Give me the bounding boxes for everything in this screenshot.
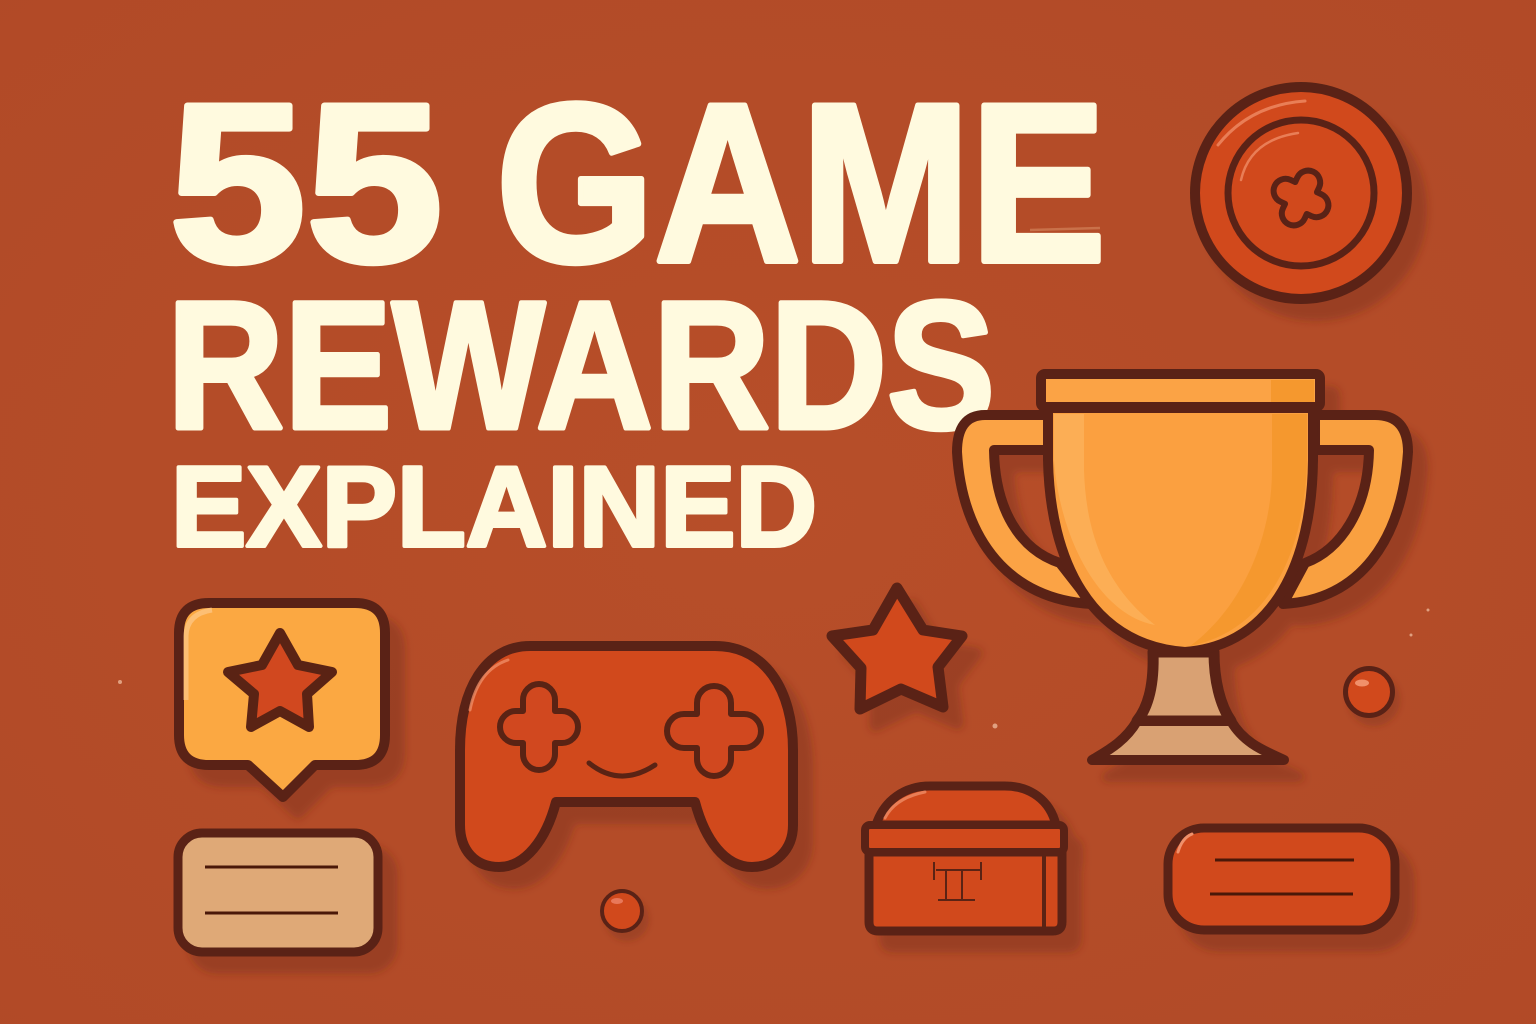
icon: star: [832, 588, 962, 709]
icon: game controller: [460, 646, 793, 867]
icon: speech bubble with star: [179, 603, 385, 797]
bubble: [179, 603, 385, 797]
icon: tan plaque: [178, 833, 378, 952]
title line: 55 GAME: GAME: [496, 56, 1106, 309]
left d-pad: [500, 684, 578, 770]
icon: small dot bottom: [602, 891, 642, 931]
smile: [589, 763, 655, 776]
icon: small dot right: [1346, 668, 1392, 716]
title line: 55 GAME: [169, 56, 1106, 309]
star in bubble: [228, 633, 332, 727]
title line: 55 GAME: 55: [169, 56, 443, 309]
title line: EXPLAINED: EXPLAINED: [171, 444, 817, 571]
icon: round button: [1195, 87, 1407, 299]
icon: red pill button: [1168, 828, 1395, 930]
right d-pad: [667, 686, 761, 776]
icon: trophy: [957, 374, 1408, 760]
icon: treasure chest: [865, 786, 1064, 931]
title: [167, 56, 1106, 571]
title line: REWARDS: REWARDS: [167, 263, 995, 467]
